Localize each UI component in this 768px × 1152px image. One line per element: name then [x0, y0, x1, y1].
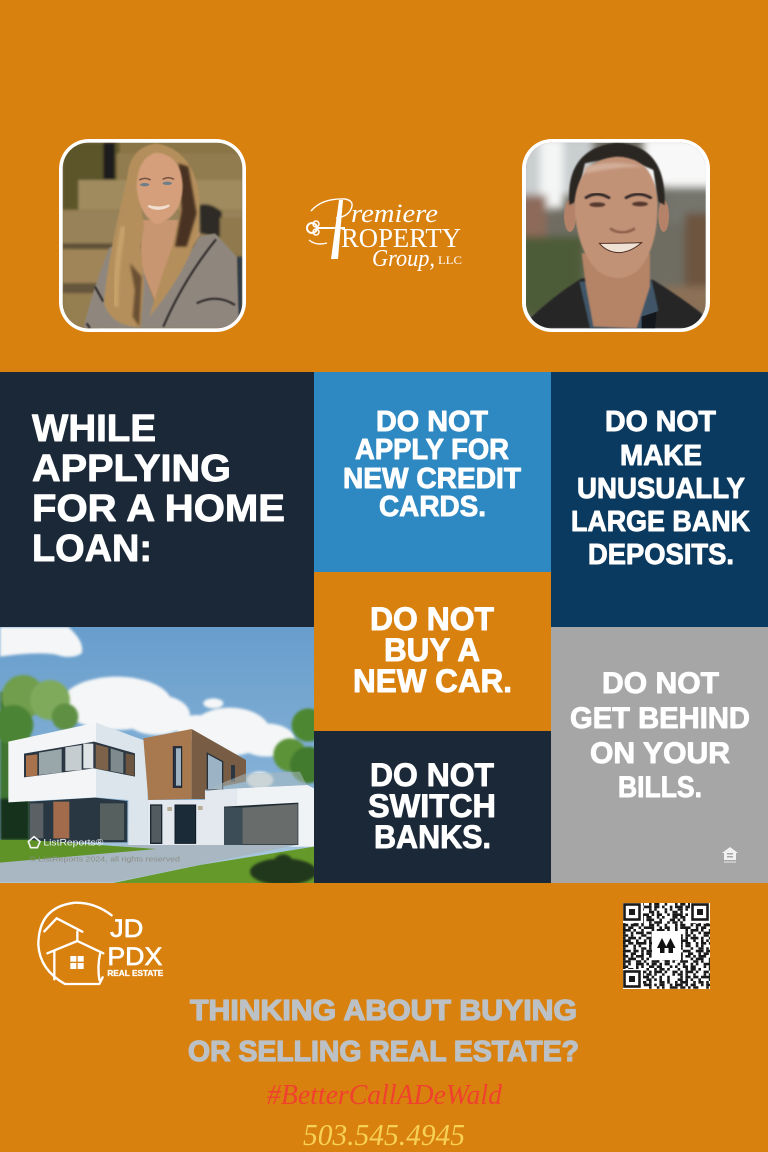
lawn — [0, 840, 157, 863]
panel: switch banks: BANKS. — [374, 819, 491, 855]
panel: credit cards: DO NOT — [376, 406, 488, 438]
text: JD: JD — [110, 915, 143, 943]
panel: new car: BUY A — [384, 632, 480, 668]
QR finder squares — [623, 903, 710, 989]
portrait: woman — [59, 139, 246, 332]
portrait: man — [520, 137, 713, 332]
phone number: 503.545.4945 — [303, 1117, 465, 1152]
panel: new car: NEW CAR. — [353, 663, 512, 699]
text: PDX: PDX — [107, 943, 162, 971]
ears — [564, 200, 576, 232]
ground floor glass — [29, 798, 127, 842]
sweater — [83, 233, 239, 328]
chest — [140, 220, 200, 302]
panel: while applying heading — [0, 372, 314, 627]
garage wing — [148, 788, 237, 845]
panel: while applying heading: FOR A HOME — [32, 488, 285, 530]
QR center icon — [652, 931, 681, 960]
panel: behind on bills: GET BEHIND — [570, 702, 750, 735]
panel: new car: DO NOT — [370, 601, 494, 637]
tree left — [0, 675, 78, 842]
neck — [582, 253, 650, 328]
watermark: ListReports® — [43, 838, 104, 848]
panel: bank deposits — [551, 372, 768, 627]
panel: bank deposits: LARGE BANK — [571, 506, 750, 538]
call to action heading: THINKING ABOUT BUYING — [190, 995, 577, 1027]
doors — [151, 805, 162, 843]
icon: key — [307, 199, 352, 259]
hair — [104, 143, 199, 327]
shrub — [250, 854, 317, 885]
panel: behind on bills: DO NOT — [602, 667, 719, 700]
panel: behind on bills — [551, 627, 768, 883]
face — [137, 153, 183, 224]
watermark — [28, 837, 180, 863]
panel: credit cards: APPLY FOR — [355, 434, 509, 466]
text: Real Estate: REAL ESTATE — [107, 969, 164, 978]
upper windows — [24, 742, 135, 777]
panel: while applying heading: WHILE — [32, 408, 156, 450]
driveway — [0, 845, 297, 882]
call to action heading — [188, 995, 579, 1068]
icon: house in circle — [38, 903, 112, 984]
clouds — [0, 627, 295, 788]
text: Property: ROPERTY — [341, 223, 461, 253]
panel: switch banks — [314, 731, 551, 883]
watermark: © ListReports 2024, all rights reserved — [29, 854, 180, 863]
panel: while applying heading: LOAN: — [32, 528, 152, 570]
panel: new car — [314, 572, 551, 731]
upper white volume — [8, 723, 96, 802]
panel: bank deposits: MAKE — [620, 440, 702, 472]
QR code — [623, 903, 710, 989]
panel: credit cards: NEW CREDIT — [343, 463, 521, 495]
icon: equal housing — [722, 847, 738, 863]
text: LLC: LLC — [438, 253, 462, 267]
panel: credit cards — [314, 372, 551, 572]
panel: bank deposits: DO NOT — [605, 406, 716, 438]
panel: switch banks: DO NOT — [370, 757, 494, 793]
head — [574, 157, 657, 278]
logo: JD PDX Real Estate — [38, 903, 164, 984]
panel: switch banks: SWITCH — [368, 788, 496, 824]
photo: modern house — [0, 625, 327, 885]
hair — [569, 143, 665, 205]
panel: bank deposits: UNUSUALLY — [577, 473, 745, 505]
logo: Premiere Property Group — [307, 199, 462, 272]
panel: bank deposits: DEPOSITS. — [588, 539, 734, 571]
text: Premiere: remiere — [351, 199, 438, 228]
panel: credit cards: CARDS. — [379, 491, 486, 523]
panel: while applying heading: APPLYING — [32, 448, 231, 490]
panel: behind on bills: ON YOUR — [590, 737, 730, 770]
panel: behind on bills: BILLS. — [618, 771, 702, 804]
wood volume — [143, 729, 192, 800]
tree right — [271, 706, 314, 786]
hashtag: #BetterCallADeWald — [267, 1079, 502, 1111]
text: Group: Group, — [372, 246, 435, 272]
jacket — [526, 278, 706, 328]
call to action heading: OR SELLING REAL ESTATE? — [188, 1036, 579, 1068]
